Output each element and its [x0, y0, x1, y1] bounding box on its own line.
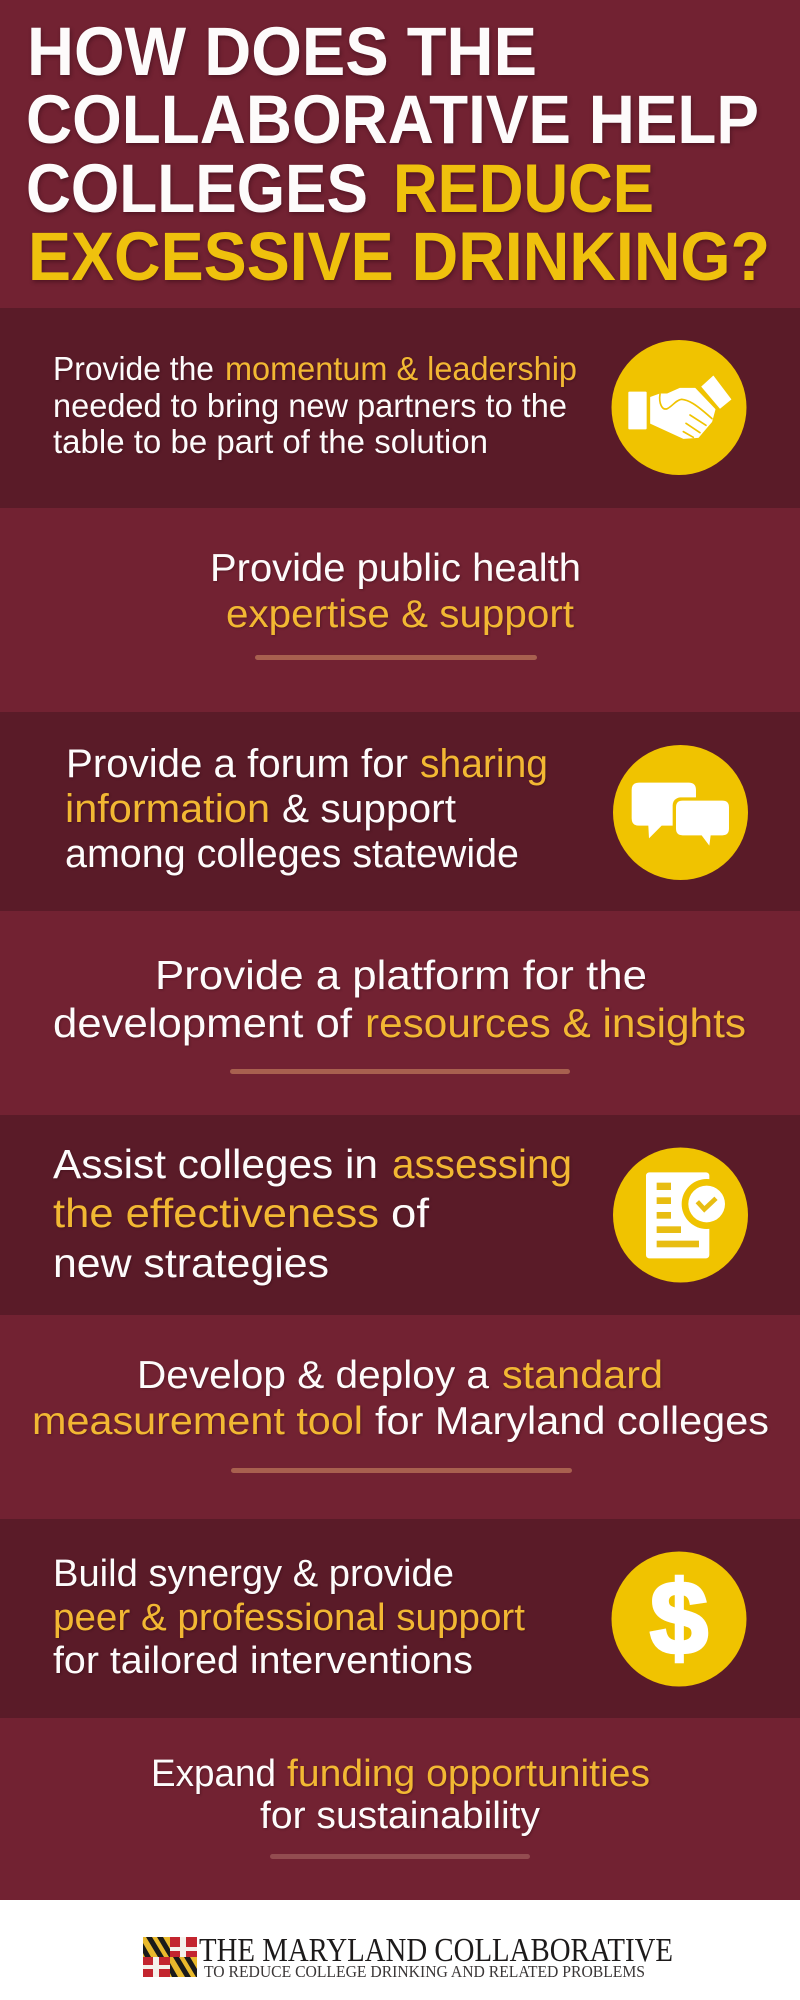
text: public health expertise: Provide public health	[210, 547, 581, 590]
text: assessing effectiveness: assessing	[392, 1141, 572, 1187]
text: standard measurement tool	[32, 1354, 769, 1443]
icon: speech bubbles	[613, 745, 748, 880]
title: HOW DOES THE	[27, 13, 537, 90]
title: COLLABORATIVE HELP	[26, 81, 759, 158]
text: public health expertise: expertise & support	[226, 593, 574, 636]
icon: dollar sign: $	[650, 1561, 708, 1677]
title: EXCESSIVE DRINKING?	[28, 218, 770, 295]
text: public health expertise	[210, 547, 581, 636]
text: platform for resources and insights: resources & insights	[365, 1000, 746, 1046]
text: momentum and leadership: momentum & leadership	[225, 350, 577, 387]
panel: standard measurement tool	[0, 1315, 800, 1519]
icon: checklist document	[613, 1148, 748, 1282]
text: funding opportunities	[151, 1753, 650, 1837]
text: assessing effectiveness	[53, 1141, 572, 1286]
text: synergy and support: Build synergy & provide	[53, 1553, 454, 1595]
panel: platform for resources and insights	[0, 911, 800, 1115]
text: platform for resources and insights: development of	[53, 1000, 353, 1046]
text: forum for sharing information: sharing	[420, 742, 548, 786]
text: momentum and leadership	[53, 350, 577, 460]
text: synergy and support: for tailored interventions	[53, 1640, 473, 1682]
icon: dollar sign	[612, 1552, 746, 1686]
text: synergy and support: peer & professional support	[53, 1597, 525, 1639]
text: standard measurement tool: for Maryland colleges	[375, 1400, 769, 1443]
title	[26, 13, 770, 295]
text: forum for sharing information: among colleges statewide	[65, 832, 519, 876]
panel: assessing effectiveness	[0, 1115, 800, 1315]
panel: public health expertise	[0, 508, 800, 712]
text: assessing effectiveness: Assist colleges in	[53, 1141, 378, 1187]
text: forum for sharing information: Provide a forum for	[66, 742, 408, 786]
icon: handshake	[612, 340, 746, 475]
footer: Maryland Collaborative logo: THE MARYLAND COLLABORATIVE	[199, 1932, 673, 1969]
text: standard measurement tool: Develop & deploy a	[137, 1354, 489, 1397]
icon: Maryland flag	[143, 1937, 197, 1977]
text: funding opportunities: for sustainability	[260, 1795, 540, 1837]
text: platform for resources and insights: Provide a platform for the	[155, 952, 647, 998]
text: funding opportunities: funding opportunities	[287, 1753, 650, 1795]
text: assessing effectiveness: new strategies	[53, 1240, 329, 1286]
panel: synergy and support	[0, 1519, 800, 1718]
text: forum for sharing information: information	[65, 787, 270, 831]
text: standard measurement tool: measurement tool	[32, 1400, 363, 1443]
footer: Maryland Collaborative logo	[0, 1900, 800, 2000]
text: forum for sharing information	[65, 742, 548, 876]
panel: momentum and leadership	[0, 308, 800, 508]
text: funding opportunities: Expand	[151, 1753, 276, 1795]
text: forum for sharing information: & support	[282, 787, 456, 831]
text: synergy and support	[53, 1553, 525, 1682]
text: momentum and leadership: needed to bring new partners to the	[53, 387, 567, 424]
text: assessing effectiveness: of	[391, 1190, 430, 1236]
footer: Maryland Collaborative logo: TO REDUCE COLLEGE DRINKING AND RELATED PROBLEMS	[204, 1962, 645, 1981]
panel: funding opportunities	[0, 1718, 800, 1900]
title: COLLEGES	[26, 150, 368, 227]
title: REDUCE	[393, 150, 654, 227]
panel: forum for sharing information	[0, 712, 800, 911]
text: standard measurement tool: standard	[502, 1354, 663, 1397]
text: platform for resources and insights	[53, 952, 746, 1046]
text: momentum and leadership: table to be part of the solution	[53, 423, 488, 460]
text: momentum and leadership: Provide the	[53, 350, 214, 387]
text: assessing effectiveness: the effectiveness	[53, 1190, 379, 1236]
